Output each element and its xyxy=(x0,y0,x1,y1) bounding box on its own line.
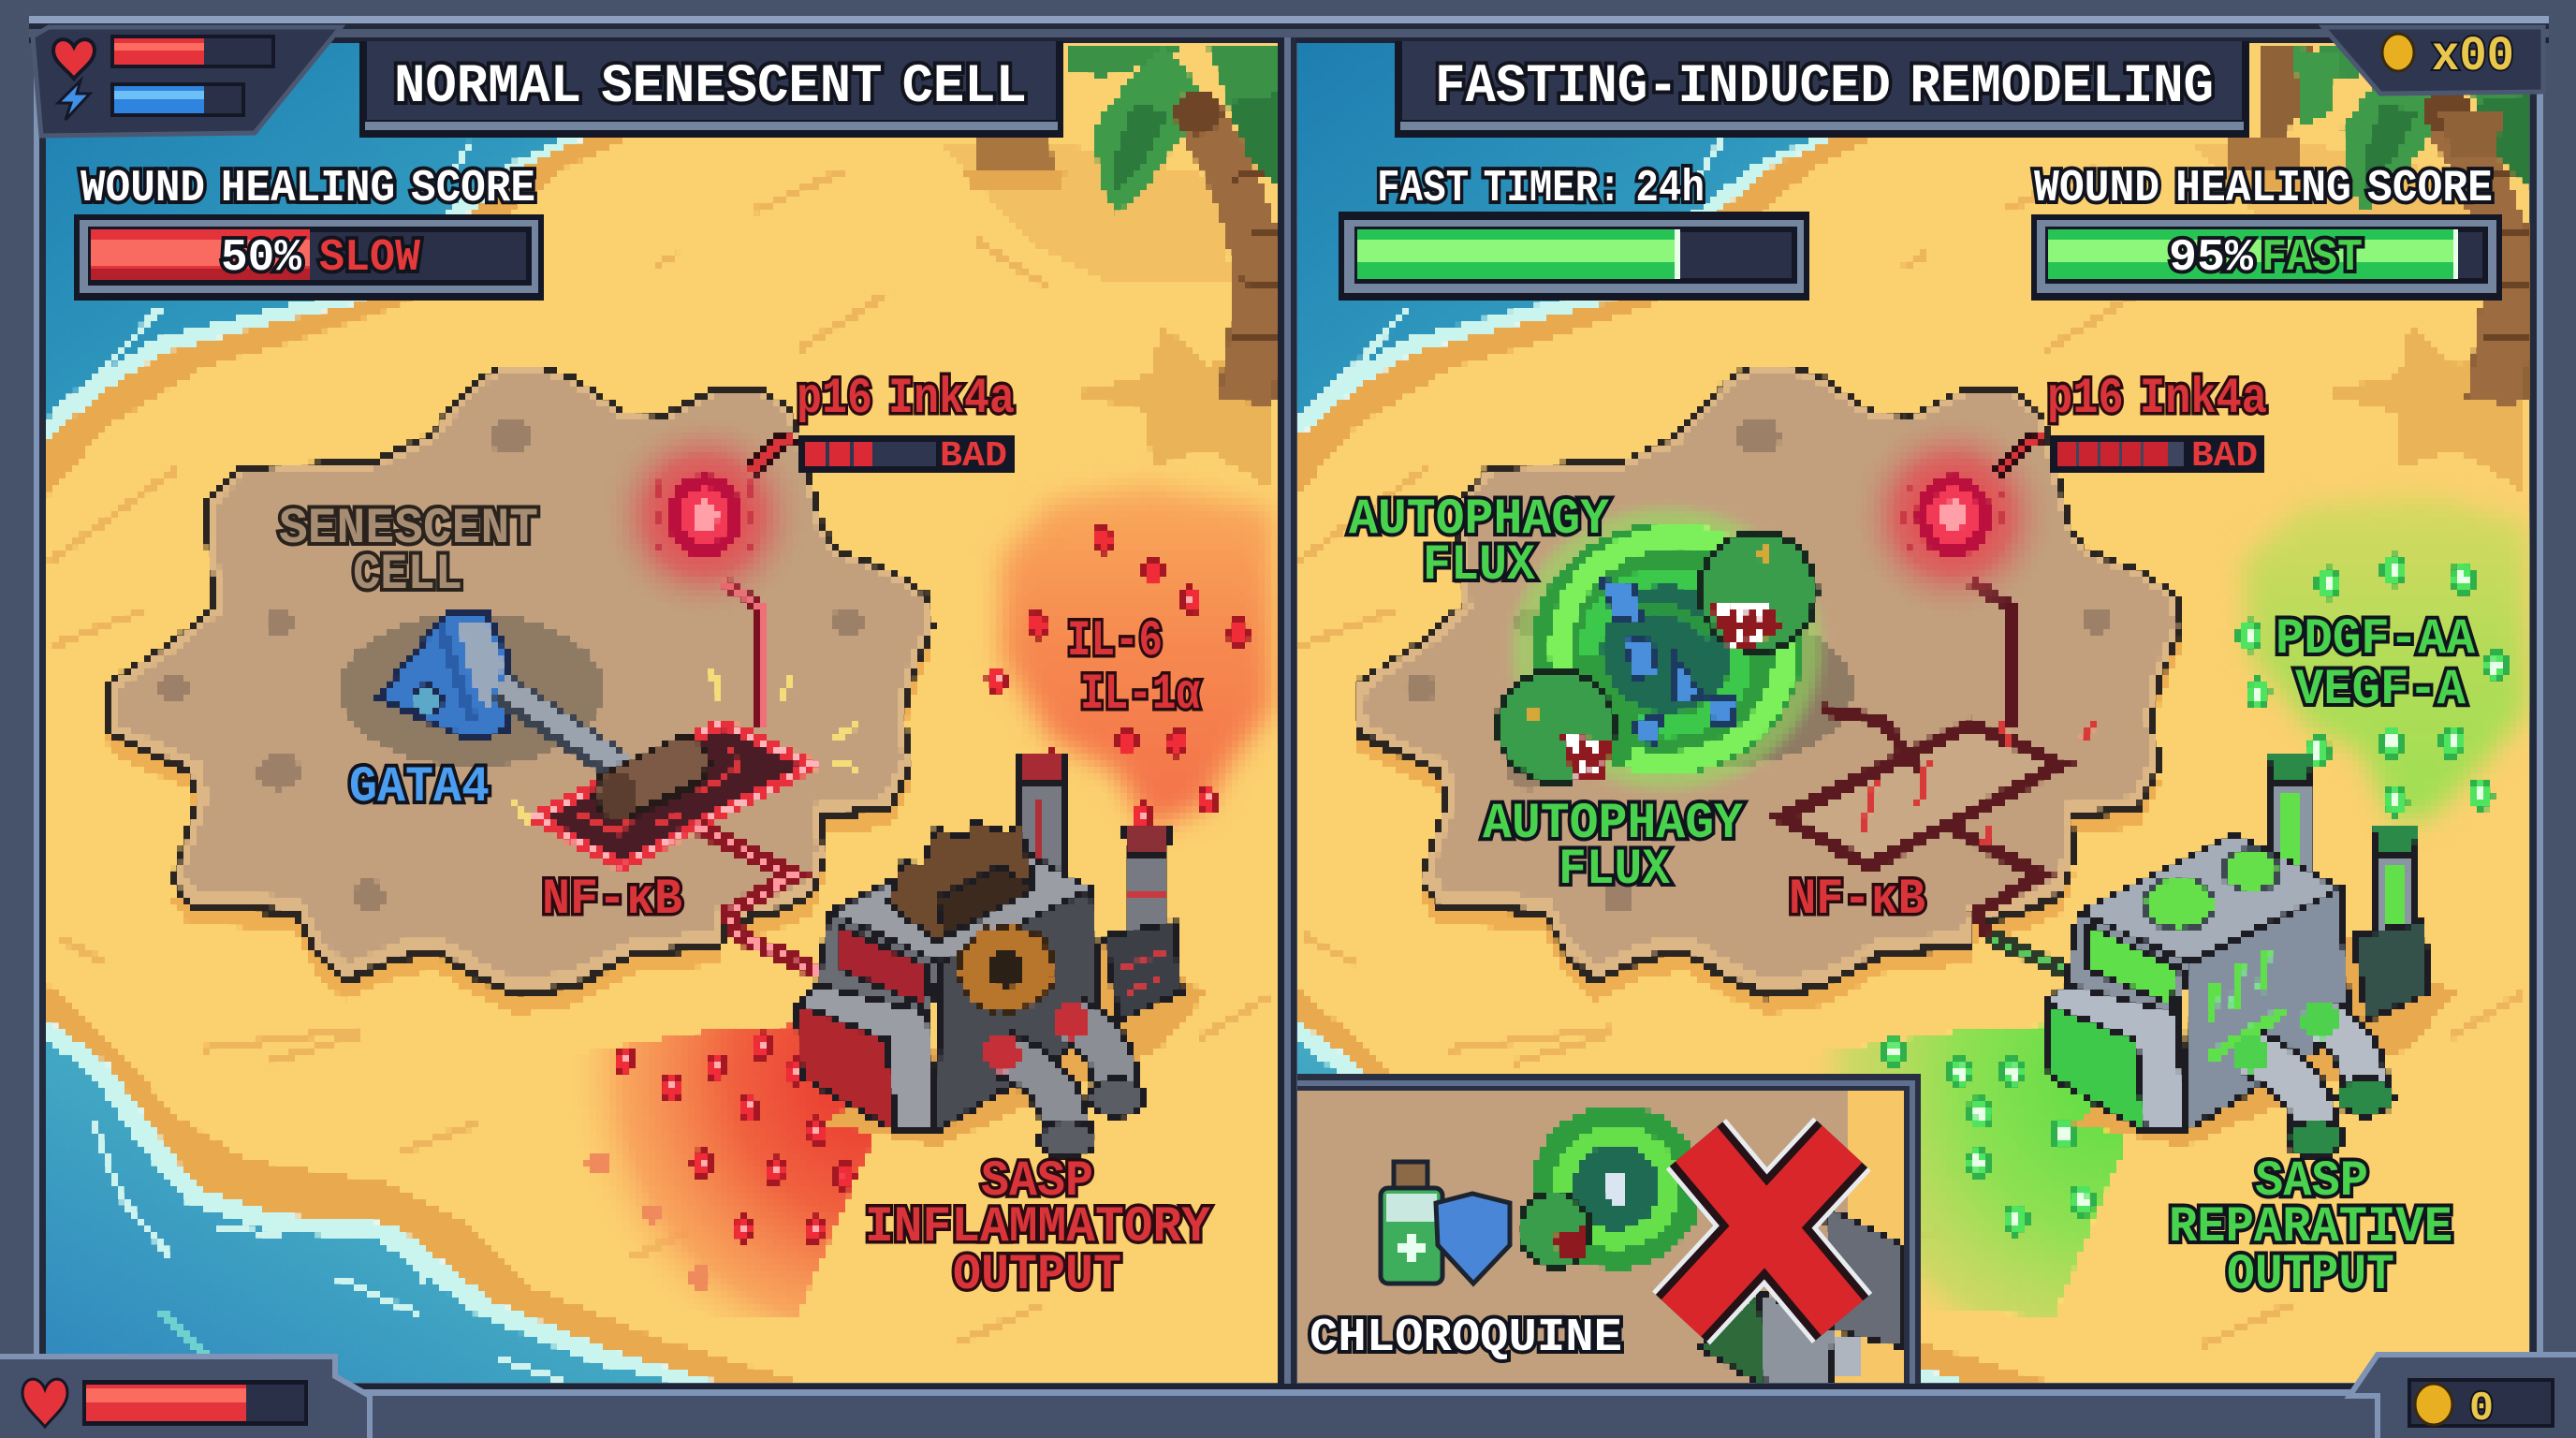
green monster upper xyxy=(1700,532,1816,652)
p16 label left xyxy=(797,371,1015,477)
green trace highlight xyxy=(1988,936,2072,974)
label: PDGF-AA and VEGF-A: VEGF-A xyxy=(2295,662,2466,719)
label: NF-kB right: NF-κB xyxy=(1789,872,1925,929)
health bar xyxy=(110,35,275,68)
score fill 50 percent xyxy=(91,229,310,280)
NF-kB circuit pad xyxy=(534,724,813,866)
icon: heart xyxy=(22,1379,67,1427)
degraded NF-kB circuit outline xyxy=(1782,724,2062,866)
green growth-factor cloud xyxy=(2243,496,2527,824)
senescent cell blob xyxy=(107,367,932,1015)
p16 label right xyxy=(2047,371,2267,477)
beach background with water and palm xyxy=(46,41,1284,1386)
coin plate xyxy=(2323,27,2543,94)
HUD: bottom health xyxy=(0,1357,370,1438)
label: IL-6 and IL-1a: IL-6 xyxy=(1067,613,1163,670)
label: senescent cell xyxy=(279,501,538,604)
inset vortex xyxy=(1530,1105,1703,1269)
title plate xyxy=(359,41,1063,138)
bottom right plate xyxy=(2349,1355,2576,1438)
label: SASP inflammatory output xyxy=(865,1153,1211,1304)
GATA4 crank gear xyxy=(378,613,856,824)
label: NF-kB left: NF-κB xyxy=(542,872,682,929)
icon: chloroquine bottle xyxy=(1381,1162,1442,1284)
circuit pad highlight xyxy=(534,724,813,866)
label: SASP reparative output xyxy=(2169,1153,2452,1304)
timer fill xyxy=(1357,229,1680,279)
reparative factory xyxy=(2045,754,2456,1147)
bottom left plate xyxy=(0,1357,370,1438)
inset sand corner xyxy=(1778,1091,1904,1384)
label: IL-6 and IL-1a: IL-1α xyxy=(1080,667,1200,724)
wound healing score right: WOUND HEALING SCORE xyxy=(2034,164,2493,214)
label: senescent cell: CELL xyxy=(353,547,462,604)
icon: lightning xyxy=(58,81,90,120)
wound healing score right: FAST xyxy=(2261,233,2363,284)
red SASP spray cone xyxy=(590,1022,871,1317)
wound healing score left xyxy=(74,164,544,301)
wound healing score left: WOUND HEALING SCORE xyxy=(80,164,535,214)
icon: coin xyxy=(2382,34,2414,71)
p16 label right: BAD xyxy=(2191,436,2258,477)
label: autophagy flux lower xyxy=(1483,796,1744,899)
red sparks xyxy=(1863,721,2097,847)
wound healing score right: 95% xyxy=(2169,233,2253,284)
green reconnected trace xyxy=(1988,936,2072,974)
HUD: bottom coins: 0 xyxy=(2469,1386,2494,1432)
title plate xyxy=(1395,41,2249,138)
red signal trace highlight xyxy=(723,582,763,730)
circuit squiggles xyxy=(580,749,739,833)
timer bar frame xyxy=(1339,212,1809,301)
inset monster xyxy=(1519,1193,1590,1268)
energy bar xyxy=(110,82,245,117)
HUD: coin counter xyxy=(2323,27,2543,94)
inset ground xyxy=(1297,1091,1904,1384)
cytokine particles xyxy=(986,524,1250,831)
title: fasting-induced remodeling xyxy=(1395,41,2249,138)
p16 label left: p16 Ink4a xyxy=(797,371,1015,428)
reparative factory pipes xyxy=(2232,1002,2393,1158)
beach background with water and palm xyxy=(1295,41,2533,1386)
inset: chloroquine blocks autophagy xyxy=(1297,1082,1912,1384)
inflammatory factory xyxy=(797,754,1208,1147)
green monster lower xyxy=(1498,670,1614,783)
chloroquine label: CHLOROQUINE xyxy=(1310,1312,1622,1365)
wound healing score right xyxy=(2031,164,2502,301)
fast timer xyxy=(1339,164,1809,301)
label: SASP inflammatory output: INFLAMMATORY xyxy=(865,1199,1211,1256)
NF-kB trace to factory xyxy=(698,827,824,974)
p16 orb right xyxy=(1849,411,2058,621)
icon: coin xyxy=(2415,1384,2452,1425)
bottom health bar xyxy=(82,1380,308,1426)
wound healing score left: 50% xyxy=(221,233,301,284)
p16 label right: p16 Ink4a xyxy=(2047,371,2267,428)
score fill 95 percent xyxy=(2048,229,2458,279)
trace highlight xyxy=(698,827,824,974)
label: SASP reparative output: OUTPUT xyxy=(2227,1247,2394,1304)
label: autophagy flux upper: FLUX xyxy=(1423,537,1536,594)
title: normal senescent cell xyxy=(359,41,1063,138)
label: GATA4: GATA4 xyxy=(349,759,490,816)
p16 label left: BAD xyxy=(940,436,1007,477)
green SASP spray cone xyxy=(1807,1020,2125,1315)
wound healing score left: SLOW xyxy=(319,233,420,284)
inset scene art xyxy=(1297,1091,1904,1384)
label: SASP reparative output: SASP xyxy=(2255,1153,2368,1211)
red cytokine cloud xyxy=(1002,485,1273,829)
label: SASP reparative output: REPARATIVE xyxy=(2169,1199,2452,1256)
inset frame highlight xyxy=(1297,1083,1912,1384)
HUD: coin counter: x00 xyxy=(2432,29,2514,84)
growth-factor particles xyxy=(2236,553,2509,817)
title: normal senescent cell: NORMAL SENESCENT CELL xyxy=(394,57,1027,118)
GATA4 crater shadow xyxy=(339,613,605,767)
autophagy vortex xyxy=(1513,508,1822,789)
HUD: health and energy xyxy=(33,27,341,136)
second palm behind title xyxy=(2258,44,2504,159)
scene art: beach, cell and reparative factory xyxy=(1295,41,2533,1386)
label: senescent cell: SENESCENT xyxy=(279,501,538,558)
p16 gauge fill xyxy=(2057,442,2168,466)
score bar frame xyxy=(2031,214,2502,301)
label: autophagy flux lower: AUTOPHAGY xyxy=(1483,796,1744,853)
p16 gauge fill xyxy=(805,442,872,466)
inset small factory xyxy=(1699,1208,1904,1384)
label: PDGF-AA and VEGF-A xyxy=(2276,611,2476,719)
label: SASP inflammatory output: SASP xyxy=(981,1153,1093,1211)
panel: fasting-induced remodeling xyxy=(1295,41,2533,1386)
factory gear xyxy=(958,926,1055,1012)
coin slot xyxy=(2409,1380,2553,1426)
scene art: beach, cell and inflammatory factory xyxy=(46,41,1284,1386)
icon: heart xyxy=(53,39,95,79)
p16 orb left xyxy=(600,411,810,621)
fast timer: FAST TIMER: 24h xyxy=(1377,164,1705,214)
score bar frame xyxy=(74,214,544,301)
senescent cell blob xyxy=(1355,367,2181,1015)
label: autophagy flux upper: AUTOPHAGY xyxy=(1349,492,1610,549)
red X block xyxy=(1681,1144,1842,1318)
label: PDGF-AA and VEGF-A: PDGF-AA xyxy=(2276,611,2476,668)
crater shadow xyxy=(1588,613,1853,767)
factory pipes xyxy=(983,1002,1145,1158)
HUD plate xyxy=(33,27,341,136)
degraded trace network xyxy=(1823,710,2042,936)
HUD: bottom coins xyxy=(2349,1355,2576,1438)
label: SASP inflammatory output: OUTPUT xyxy=(953,1247,1121,1304)
p16 gauge xyxy=(2050,435,2264,473)
SASP particles xyxy=(586,1025,870,1289)
label: IL-6 and IL-1a xyxy=(1067,613,1200,724)
title: fasting-induced remodeling: FASTING-INDUCED REMODELING xyxy=(1435,57,2214,118)
panel: normal senescent cell xyxy=(46,41,1284,1386)
label: autophagy flux upper xyxy=(1349,492,1610,594)
inset frame xyxy=(1297,1082,1912,1384)
red signal trace from p16 orb xyxy=(723,582,763,730)
p16 gauge xyxy=(798,435,1015,473)
reparative particles xyxy=(1881,1023,2115,1237)
label: autophagy flux lower: FLUX xyxy=(1559,842,1671,899)
icon: blue shield xyxy=(1436,1194,1510,1284)
dimmed signal trace xyxy=(1971,582,2012,730)
